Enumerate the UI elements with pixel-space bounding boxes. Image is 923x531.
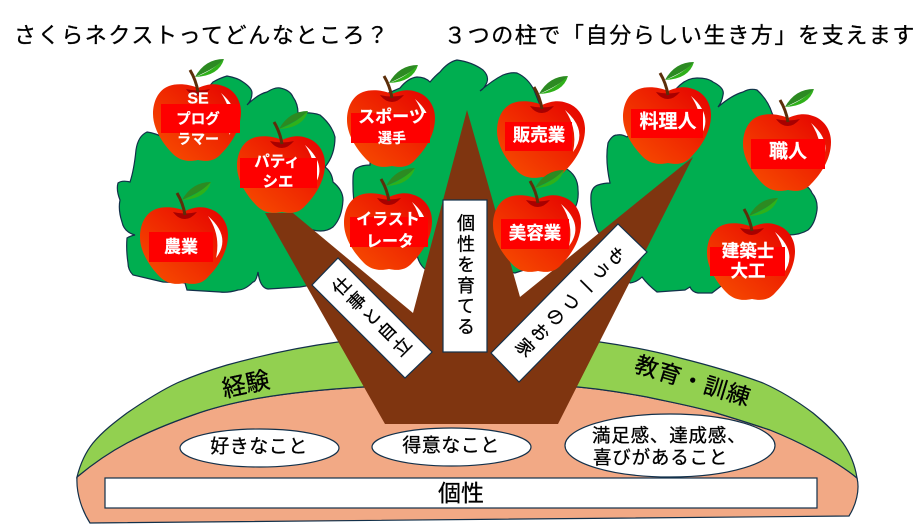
ellipse: fulfilment — [565, 414, 775, 477]
apple: beautician — [493, 170, 581, 272]
pillar label: right — [491, 224, 647, 382]
apple: beautician: 美容業 — [509, 223, 562, 243]
apple: illustrator: イラスト — [356, 212, 420, 228]
apple: illustrator — [344, 168, 432, 270]
apple: agriculture: 農業 — [164, 238, 198, 256]
tree foliage: right — [591, 78, 817, 293]
title: left heading: さくらネクストってどんなところ？ — [14, 23, 390, 48]
apple: sales: 販売業 — [513, 125, 566, 145]
apple: patissier: シエ — [262, 174, 294, 190]
apple: athlete — [347, 65, 435, 167]
apple: athlete: スポーツ — [358, 106, 426, 126]
trunk with three branches — [265, 110, 693, 424]
ellipse: strengths — [372, 428, 531, 466]
tree foliage: centre — [353, 60, 578, 273]
apple: patissier — [237, 111, 325, 213]
label: education and training: 教育・訓練 — [632, 351, 754, 411]
label: experience: 経験 — [220, 367, 272, 403]
ellipse: likes: 好きなこと — [210, 436, 308, 458]
tree foliage: left — [117, 76, 343, 292]
apple: sales — [497, 76, 585, 178]
ellipse: strengths: 得意なこと — [402, 434, 500, 456]
apple: chef: 料理人 — [639, 110, 697, 132]
pillar label: centre — [443, 200, 487, 352]
ellipse: fulfilment: 満足感、達成感、 — [592, 425, 746, 446]
apple: craftsman: 職人 — [769, 140, 807, 162]
apple: patissier: パティ — [254, 152, 300, 170]
apple: athlete: 選手 — [378, 130, 406, 146]
apple: SE programmer: プログ — [176, 110, 220, 128]
pillar label: left — [312, 258, 432, 378]
pillar label: left: 仕事と自立 — [327, 273, 417, 363]
pillar label: right: もう一つのお家 — [508, 241, 630, 363]
ellipse: likes — [180, 429, 339, 467]
ground: personality soil — [77, 387, 858, 523]
apple: architect and carpenter — [707, 198, 795, 300]
apple: SE programmer — [153, 59, 241, 161]
apple: SE programmer: ラマー — [177, 131, 219, 147]
title: right heading: ３つの柱で「自分らしい生き方」を支えます — [444, 23, 916, 48]
box: individuality — [105, 478, 817, 508]
apple: SE programmer: SE — [187, 90, 209, 108]
apple: architect and carpenter: 建築士 — [722, 241, 774, 261]
ground: green arc — [77, 342, 857, 478]
apple: craftsman — [743, 89, 831, 191]
apple: illustrator: レータ — [366, 232, 414, 250]
box: individuality: 個性 — [438, 480, 484, 506]
ellipse: fulfilment: 喜びがあること — [593, 447, 728, 468]
apple: chef — [623, 62, 711, 164]
apple: agriculture — [140, 182, 228, 284]
apple: architect and carpenter: 大工 — [730, 261, 766, 281]
pillar label: centre: 個性を育てる — [455, 214, 475, 338]
